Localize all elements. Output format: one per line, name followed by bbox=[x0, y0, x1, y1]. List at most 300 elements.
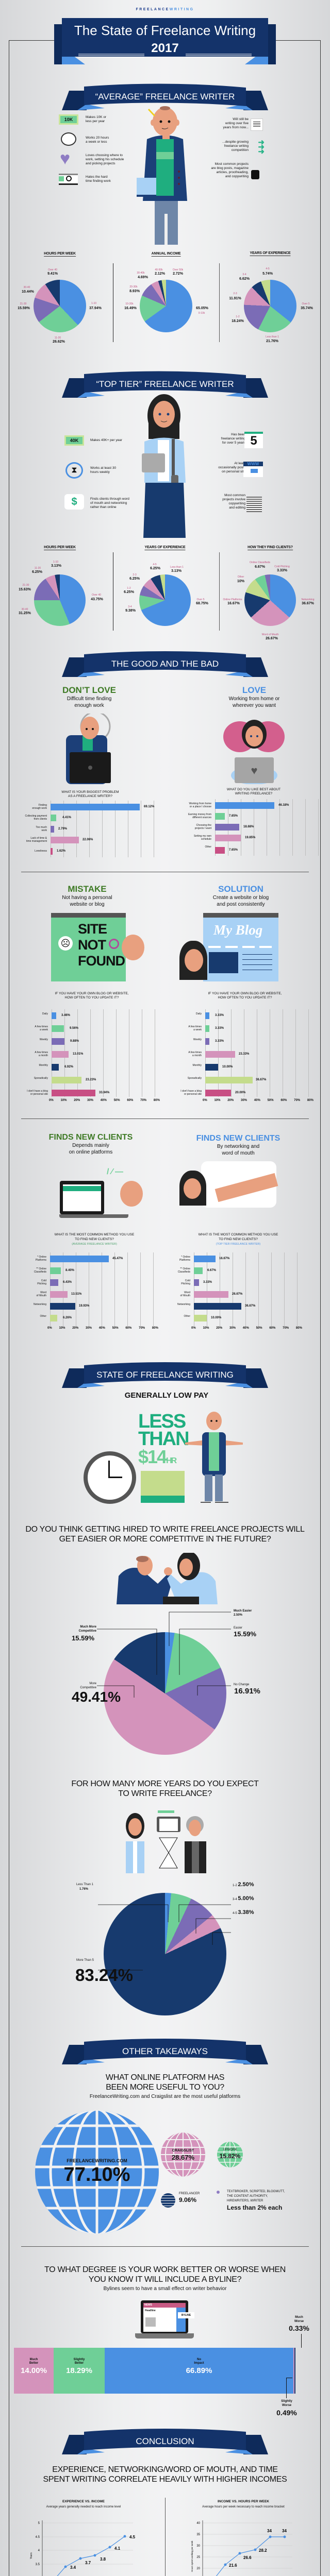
chart: annual income: 0-10k bbox=[199, 312, 205, 315]
chart: top tier experience: 6.25% bbox=[129, 577, 140, 581]
chart: experience vs income: 4.5 bbox=[129, 2535, 136, 2539]
average traits right: freelance writing bbox=[224, 144, 249, 148]
chart: find clients top tier: 20% bbox=[216, 1327, 222, 1330]
banner: other takeaways bbox=[62, 2037, 268, 2065]
chart: find clients average: of Mouth bbox=[37, 1294, 46, 1297]
icon: dollar speech: $ bbox=[71, 496, 77, 507]
chart: find clients top tier: 10.00% bbox=[211, 1316, 221, 1319]
illustration: arm wrestling bbox=[117, 1553, 218, 1604]
average traits left: time finding work bbox=[86, 179, 111, 183]
heading: solution: and post consistently bbox=[217, 902, 265, 907]
chart: years of experience: Over 5 bbox=[302, 302, 310, 306]
icon: calendar 5: 5 bbox=[250, 434, 257, 448]
chart: years of experience: 21.76% bbox=[266, 340, 278, 343]
average traits right: Most common projects bbox=[215, 162, 249, 166]
chart: top tier experience: 9.38% bbox=[125, 609, 136, 613]
pie: years to write bbox=[72, 1875, 268, 2020]
chart: find clients average: 0% bbox=[47, 1327, 52, 1330]
callout: much worse bbox=[286, 2315, 312, 2348]
average traits left: Hates the hard bbox=[86, 175, 108, 179]
icon: pen and ink bbox=[251, 170, 259, 179]
callout: slightly worse: Worse bbox=[282, 2404, 291, 2407]
chart: hours per week average: 10.44% bbox=[22, 290, 34, 294]
chart: years of experience: 1-2 bbox=[236, 315, 240, 318]
chart: find clients top tier: 0% bbox=[191, 1327, 196, 1330]
heading: solution: SOLUTION bbox=[218, 884, 263, 894]
chart: update frequency (top tier): 10.00% bbox=[222, 1065, 233, 1069]
callout: much worse: Worse bbox=[294, 2320, 304, 2323]
average traits right: writing over five bbox=[225, 122, 249, 125]
chart: biggest problem: Collecting payment bbox=[25, 815, 47, 818]
chart: update frequency (average): 23.23% bbox=[86, 1078, 96, 1081]
icon: 40K bbox=[64, 435, 84, 446]
icon: writing paper bbox=[251, 118, 263, 131]
average traits right: articles, proofreading, bbox=[216, 171, 249, 174]
chart: find clients average: 70% bbox=[139, 1327, 145, 1330]
chart: find clients average: Networking bbox=[34, 1303, 46, 1306]
heading: getting hired question: DO YOU THINK GETTING HIRED TO WRITE FREELANCE PROJECTS WILL bbox=[25, 1525, 305, 1534]
chart: update frequency (top tier): a week bbox=[193, 1028, 202, 1031]
chart: like best: 18.68% bbox=[243, 825, 254, 828]
illustration: people and hourglass bbox=[126, 1809, 208, 1873]
chart: update frequency (average): A few times bbox=[35, 1025, 48, 1028]
chart: update frequency (top tier): 23.33% bbox=[239, 1053, 249, 1056]
average traits right: are blog posts, magazine bbox=[211, 166, 249, 170]
chart: find clients average: Pitching bbox=[37, 1282, 46, 1285]
top tier traits left: hours weekly bbox=[90, 470, 110, 474]
chart: hours per week average: 37.94% bbox=[89, 307, 102, 310]
chart: find clients average: Platforms bbox=[36, 1259, 46, 1262]
text: other platforms: Less than 2% each bbox=[227, 2204, 282, 2211]
pie: years to write: Less Than 1 bbox=[76, 1883, 93, 1886]
chart: update frequency (average): 80% bbox=[154, 1099, 160, 1102]
chart: top tier experience: 6.25% bbox=[150, 567, 160, 570]
banner: good and bad: THE GOOD AND THE BAD bbox=[111, 659, 219, 669]
icon: arrows: ➜ bbox=[258, 147, 265, 156]
pie: easier or more competitive: Much Easier bbox=[234, 1609, 252, 1613]
chart: how they find clients: 36.67% bbox=[302, 602, 314, 605]
heading: finds new clients top bbox=[196, 1134, 280, 1156]
heading: getting hired question: GET EASIER OR MORE COMPETITIVE IN THE FUTURE? bbox=[59, 1535, 271, 1544]
chart: income vs hours: 30 bbox=[196, 2545, 201, 2548]
chart: income vs hours: 40 bbox=[196, 2522, 201, 2525]
chart: years of experience: 5.74% bbox=[262, 272, 273, 276]
icon: clock bbox=[61, 132, 76, 146]
average traits right: years from now... bbox=[223, 126, 249, 129]
chart: like best: schedule bbox=[201, 838, 211, 841]
illustration: clock bbox=[84, 1451, 136, 1504]
chart: annual income: 30-40k bbox=[137, 272, 145, 275]
chart: top tier hours: 15.63% bbox=[19, 588, 31, 591]
chart: find clients average: 60% bbox=[125, 1327, 131, 1330]
chart: like best: Choosing the bbox=[196, 824, 211, 827]
banner: top tier bbox=[62, 371, 268, 398]
illustration: handshake bbox=[179, 1161, 278, 1208]
chart: years of experience: 2-3 bbox=[233, 292, 237, 295]
chart: biggest problem: Lack of time & bbox=[30, 837, 47, 840]
banner: conclusion bbox=[62, 2427, 268, 2455]
illustration: laptop search: / ⁄ — bbox=[107, 1167, 123, 1176]
chart: find clients average: Word bbox=[40, 1291, 46, 1294]
pie: easier or more competitive: Easier bbox=[234, 1626, 242, 1630]
heading: finds new clients average: FINDS NEW CLIENTS bbox=[49, 1133, 133, 1142]
illustration: man with laptop bbox=[66, 714, 111, 784]
pie: years to write: 4-5 3.38% bbox=[233, 1909, 254, 1916]
top tier traits right: copywriting bbox=[228, 502, 245, 505]
icon: www: WWW bbox=[248, 462, 259, 466]
average traits right: and copywriting bbox=[225, 175, 249, 178]
byline stacked bar: Better bbox=[29, 2362, 38, 2365]
chart: annual income: 2.12% bbox=[155, 272, 165, 276]
chart: update frequency (average): Weekly bbox=[40, 1038, 48, 1041]
chart: income vs hours bbox=[186, 2500, 299, 2576]
chart: find clients average: * Online bbox=[37, 1256, 46, 1259]
illustration: site not found: ☹ bbox=[61, 938, 70, 948]
chart: like best: or a place I choose bbox=[190, 805, 211, 808]
chart: update frequency (top tier): A few times bbox=[188, 1025, 202, 1028]
chart: hours per week average: Over 40 bbox=[48, 268, 57, 272]
chart: income vs hours: 20 bbox=[196, 2567, 201, 2570]
chart: like best: 46.18% bbox=[278, 804, 289, 807]
byline stacked bar: 18.29% bbox=[66, 2366, 92, 2375]
chart: income vs hours: 21.6 bbox=[229, 2563, 237, 2568]
chart: update frequency (average): a month bbox=[39, 1054, 48, 1057]
chart: like best: WRITING FREELANCE? bbox=[235, 792, 272, 795]
heading: love bbox=[229, 685, 279, 708]
chart: find clients average: 8.40% bbox=[65, 1269, 74, 1272]
chart: biggest problem: 4.41% bbox=[62, 816, 71, 819]
heading: online platform question: WHAT ONLINE PLATFORM HAS bbox=[106, 2073, 224, 2082]
chart: update frequency (average): 6.92% bbox=[64, 1065, 73, 1069]
chart: top tier experience bbox=[124, 546, 208, 626]
banner: conclusion: CONCLUSION bbox=[136, 2436, 194, 2446]
chart: update frequency (top tier): HOW OFTEN TO YOU UPDATE IT? bbox=[218, 996, 272, 999]
chart: update frequency (top tier): 3.33% bbox=[215, 1027, 224, 1030]
chart: find clients top tier: Word bbox=[184, 1291, 190, 1294]
illustration: woman with laptop bbox=[223, 720, 285, 784]
heading: finds new clients average: on online platforms bbox=[69, 1149, 112, 1155]
text: other platforms: HIREWRITERS, iWRITER bbox=[227, 2199, 263, 2202]
pie: easier or more competitive: Much More bbox=[80, 1625, 96, 1629]
chart: annual income: 20-30k bbox=[129, 285, 138, 289]
chart: how they find clients: Word of Mouth bbox=[262, 633, 278, 636]
chart: update frequency (average): Monthly bbox=[39, 1064, 48, 1067]
chart: find clients top tier: TO FIND NEW CLIENTS? bbox=[219, 1238, 258, 1241]
chart: years of experience: Less than 1 bbox=[266, 335, 279, 338]
illustration: my blog: My Blog bbox=[213, 922, 262, 938]
chart: how they find clients: 3.33% bbox=[277, 569, 287, 572]
pie: easier or more competitive: No Change bbox=[234, 1683, 249, 1686]
chart: find clients top tier: 70% bbox=[283, 1327, 289, 1330]
globe: upwork: UPWORK bbox=[223, 2148, 237, 2151]
chart: update frequency (top tier): IF YOU HAVE YOUR OWN BLOG OR WEBSITE, bbox=[208, 992, 282, 995]
heading: don't love: Difficult time finding bbox=[67, 696, 111, 702]
chart: biggest problem: from clients bbox=[34, 818, 47, 821]
average traits left: Works 20 hours bbox=[86, 136, 109, 140]
divider bbox=[21, 1118, 309, 1119]
chart: find clients top tier bbox=[177, 1233, 302, 1330]
chart: top tier hours: 31.25% bbox=[19, 612, 31, 615]
top tier traits left: of mouth and networking bbox=[90, 501, 127, 505]
heading: mistake: Not having a personal bbox=[62, 895, 112, 901]
average traits left: work, setting his schedule bbox=[86, 158, 124, 161]
illustration: laptop search bbox=[59, 1167, 143, 1218]
chart: annual income: ANNUAL INCOME bbox=[152, 252, 180, 256]
chart: top tier experience: 2-3 bbox=[133, 573, 137, 577]
byline stacked bar: Better bbox=[75, 2362, 84, 2365]
chart: years of experience: 6.62% bbox=[239, 277, 250, 281]
top tier traits left bbox=[64, 435, 129, 510]
chart: update frequency (average): A few times bbox=[35, 1051, 48, 1054]
heading: finds new clients top: word of mouth bbox=[222, 1150, 255, 1156]
chart: find clients top tier: Pitching bbox=[181, 1282, 190, 1285]
chart: find clients top tier: Other bbox=[184, 1315, 190, 1318]
chart: find clients average: 6.43% bbox=[63, 1281, 72, 1284]
illustration: my blog bbox=[179, 913, 278, 981]
callout: slightly worse: 0.49% bbox=[276, 2409, 297, 2417]
chart: find clients top tier: ** Online bbox=[180, 1267, 190, 1270]
chart: top tier experience: 1-2 bbox=[127, 587, 131, 590]
heading: generally low pay: GENERALLY LOW PAY bbox=[125, 1391, 208, 1400]
chart: annual income bbox=[124, 252, 208, 332]
chart: experience vs income: 3.4 bbox=[70, 2565, 76, 2570]
illustration: average man bbox=[137, 106, 187, 245]
average traits right: ...despite growing bbox=[222, 140, 249, 144]
chart: find clients average: 10% bbox=[59, 1327, 65, 1330]
chart: find clients average: 45.47% bbox=[112, 1257, 123, 1260]
chart: find clients top tier: 16.67% bbox=[219, 1257, 229, 1260]
title banner: 2017 bbox=[151, 41, 179, 55]
chart: biggest problem: WHAT IS YOUR BIGGEST PROBLEM bbox=[61, 790, 119, 794]
callout: much worse: 0.33% bbox=[289, 2324, 309, 2332]
heading: love: Working from home or bbox=[229, 696, 279, 702]
chart: like best: different sources bbox=[192, 816, 211, 819]
average traits right: Will still be bbox=[233, 117, 249, 121]
heading: finds new clients top: FINDS NEW CLIENTS bbox=[196, 1134, 280, 1143]
chart: top tier experience: 4-5 bbox=[153, 563, 157, 566]
byline stacked bar bbox=[14, 2348, 295, 2394]
chart: experience vs income: Average years generally needed to reach income level bbox=[46, 2505, 121, 2509]
chart: biggest problem: Finding bbox=[39, 804, 47, 807]
chart: find clients top tier: 3.33% bbox=[203, 1281, 212, 1284]
chart: experience vs income: 3.8 bbox=[100, 2557, 106, 2562]
chart: biggest problem: 69.12% bbox=[144, 805, 154, 808]
globe: craigslist bbox=[161, 2132, 205, 2177]
pie: easier or more competitive: Competitive bbox=[79, 1630, 96, 1633]
chart: update frequency (average): 60% bbox=[127, 1099, 133, 1102]
pie: years to write: 3-4 5.00% bbox=[233, 1895, 254, 1902]
pie: easier or more competitive: More bbox=[89, 1682, 96, 1685]
chart: like best: 7.65% bbox=[229, 849, 238, 852]
chart: update frequency (top tier): 20.00% bbox=[235, 1091, 245, 1094]
chart: update frequency (average): 30% bbox=[87, 1099, 93, 1102]
banner: average bbox=[62, 83, 268, 110]
chart: update frequency (average): 3.46% bbox=[61, 1014, 70, 1017]
illustration: laptop news byline: NEWS bbox=[144, 2303, 152, 2307]
icon: arrows: ➜ bbox=[258, 143, 265, 151]
chart: years of experience: 3-4 bbox=[242, 273, 246, 276]
chart: experience vs income: 3.5 bbox=[36, 2563, 40, 2566]
chart: top tier experience: YEARS OF EXPERIENCE bbox=[144, 546, 186, 549]
globe: freelancer: 9.06% bbox=[179, 2196, 196, 2204]
chart: update frequency (top tier): 0% bbox=[203, 1099, 207, 1102]
chart: years of experience bbox=[229, 251, 313, 343]
text: less than $14 hr: $14HR bbox=[138, 1446, 176, 1467]
heading: finds new clients top: By networking and bbox=[217, 1144, 259, 1149]
globe: upwork bbox=[217, 2142, 243, 2167]
chart: like best: WHAT DO YOU LIKE BEST ABOUT bbox=[227, 788, 280, 791]
heading: online platform question: BEEN MORE USEFUL TO YOU? bbox=[106, 2083, 224, 2092]
chart: update frequency (average): HOW OFTEN TO YOU UPDATE IT? bbox=[65, 996, 119, 999]
illustration: shrugging man bbox=[185, 1412, 243, 1503]
heading: mistake: website or blog bbox=[70, 902, 105, 907]
chart: income vs hours: 34 bbox=[282, 2529, 287, 2533]
chart: update frequency (top tier): Daily bbox=[196, 1012, 202, 1015]
chart: update frequency (top tier): 36.67% bbox=[256, 1078, 266, 1081]
chart: top tier experience: 68.75% bbox=[196, 602, 208, 605]
illustration: woman with laptop: ♥ bbox=[251, 764, 258, 777]
icon: search bbox=[59, 174, 78, 185]
globe: craigslist: CRAIGSLIST bbox=[172, 2149, 194, 2153]
pie: years to write: 1-2 2.50% bbox=[233, 1882, 254, 1888]
illustration: site not found: FOUND bbox=[78, 953, 125, 969]
chart: update frequency (top tier): 10% bbox=[214, 1099, 220, 1102]
icon: hourglass cycle bbox=[65, 462, 83, 479]
chart: experience vs income: 4.1 bbox=[114, 2546, 121, 2551]
byline stacked bar: Much bbox=[30, 2358, 38, 2361]
chart: update frequency (average): or personal site bbox=[30, 1093, 48, 1096]
top tier traits right: Has been bbox=[231, 433, 245, 436]
chart: income vs hours: 34 bbox=[267, 2529, 272, 2533]
chart: top tier experience: Over 5 bbox=[196, 598, 205, 601]
chart: annual income: 10-20k bbox=[125, 302, 134, 306]
chart: update frequency (top tier): 40% bbox=[254, 1099, 260, 1102]
chart: experience vs income: 5 bbox=[38, 2522, 40, 2525]
chart: update frequency (average): 70% bbox=[140, 1099, 146, 1102]
heading: conclusion bbox=[43, 2465, 287, 2484]
heading: love: wherever you want bbox=[233, 703, 276, 708]
chart: how they find clients: Networking bbox=[301, 598, 315, 601]
chart: top tier hours: 43.75% bbox=[91, 598, 103, 601]
chart: top tier hours bbox=[19, 546, 103, 626]
top tier traits left: Works at least 30 bbox=[90, 466, 116, 470]
top tier traits right: occasionally posts bbox=[218, 466, 245, 469]
banner: other takeaways: OTHER TAKEAWAYS bbox=[122, 2046, 208, 2056]
divider bbox=[21, 2246, 309, 2247]
chart: update frequency (top tier): 30% bbox=[241, 1099, 247, 1102]
icon: calendar 5 bbox=[244, 432, 263, 448]
chart: find clients top tier: 80% bbox=[296, 1327, 302, 1330]
top tier traits right: and editing bbox=[229, 506, 245, 510]
heading: online platform question: FreelanceWriting.com and Craigslist are the most useful platforms bbox=[90, 2094, 240, 2099]
chart: like best: 7.65% bbox=[229, 815, 238, 818]
chart: update frequency (top tier): Monthly bbox=[192, 1064, 202, 1067]
chart: top tier hours: 6.25% bbox=[32, 570, 42, 574]
chart: update frequency (average): Daily bbox=[42, 1012, 48, 1015]
average traits left: Loves choosing where to bbox=[86, 154, 123, 157]
chart: update frequency (average): 13.01% bbox=[73, 1053, 83, 1056]
pie: years to write: 83.24% bbox=[75, 1965, 133, 1985]
icon: arrows bbox=[258, 138, 265, 156]
chart: income vs hours: 28.2 bbox=[259, 2548, 267, 2553]
chart: top tier hours: 11-20 bbox=[35, 567, 41, 570]
chart: experience vs income: 3.7 bbox=[85, 2561, 91, 2565]
chart: find clients average: 13.51% bbox=[71, 1293, 81, 1296]
chart: find clients top tier: 10% bbox=[203, 1327, 209, 1330]
icon: documents bbox=[246, 497, 262, 512]
title banner: The State of Freelance Writing bbox=[74, 23, 256, 38]
heading: don't love: enough work bbox=[74, 703, 104, 708]
chart: find clients top tier: 6.67% bbox=[207, 1269, 216, 1272]
chart: find clients top tier: Cold bbox=[185, 1279, 190, 1282]
globe: freelancer: FREELANCER bbox=[179, 2192, 200, 2195]
chart: years of experience: 11.91% bbox=[229, 297, 241, 300]
top tier traits left: Makes 40K+ per year bbox=[90, 438, 122, 442]
chart: biggest problem: work bbox=[41, 829, 47, 832]
chart: like best bbox=[188, 788, 319, 856]
chart: find clients average: 19.93% bbox=[79, 1304, 89, 1308]
chart: update frequency (top tier): 3.33% bbox=[215, 1014, 224, 1017]
top tier traits right: on personal site bbox=[222, 470, 245, 473]
icon: 10K money bbox=[59, 114, 78, 125]
chart: find clients top tier: 50% bbox=[256, 1327, 262, 1330]
chart: income vs hours: Hours spent working per week bbox=[191, 2540, 193, 2572]
chart: top tier hours: 3.13% bbox=[51, 564, 61, 568]
chart: annual income: Over 50k bbox=[173, 268, 183, 272]
heading: years to write question: TO WRITE FREELANCE? bbox=[118, 1789, 212, 1798]
pie: easier or more competitive: 16.91% bbox=[234, 1687, 260, 1696]
icon: 40K: 40K bbox=[70, 438, 78, 443]
chart: top tier experience: 6.25% bbox=[124, 590, 134, 594]
chart: find clients average: 80% bbox=[152, 1327, 158, 1330]
chart: find clients top tier: WHAT IS THE MOST COMMON METHOD YOU USE bbox=[199, 1233, 278, 1236]
chart: find clients top tier: Networking bbox=[177, 1303, 190, 1306]
chart: how they find clients: Online Platforms bbox=[223, 598, 242, 601]
chart: income vs hours: INCOME VS. HOURS PER WEEK bbox=[218, 2500, 269, 2503]
chart: find clients top tier: * Online bbox=[181, 1256, 190, 1259]
chart: find clients top tier: 36.67% bbox=[245, 1304, 255, 1308]
chart: find clients average: 6.26% bbox=[63, 1316, 72, 1319]
pie charts row 2 dividers bbox=[113, 552, 220, 631]
banner: good and bad bbox=[62, 651, 268, 677]
chart: experience vs income: EXPERIENCE VS. INCOME bbox=[62, 2500, 105, 2503]
chart: update frequency (top tier): a month bbox=[192, 1054, 202, 1057]
chart: update frequency (top tier): 50% bbox=[268, 1099, 274, 1102]
chart: income vs hours: 26.6 bbox=[243, 2555, 252, 2560]
chart: top tier hours: HOURS PER WEEK bbox=[44, 546, 76, 549]
heading: finds new clients average bbox=[49, 1133, 133, 1155]
chart: like best: Setting my own bbox=[194, 835, 211, 838]
heading: online platform question bbox=[90, 2073, 240, 2099]
chart: years of experience: YEARS OF EXPERIENCE bbox=[250, 251, 291, 255]
chart: income vs hours: 35 bbox=[196, 2533, 201, 2536]
heading: mistake: MISTAKE bbox=[68, 884, 107, 894]
average traits left bbox=[59, 114, 124, 185]
chart: biggest problem: AS A FREELANCE WRITER? bbox=[68, 794, 112, 798]
icon: dollar speech bbox=[64, 494, 84, 510]
icon: 10K money: 10K bbox=[64, 117, 73, 122]
pie charts row 1 dividers bbox=[113, 263, 220, 342]
heading: mistake bbox=[62, 884, 112, 907]
heading: solution: Create a website or blog bbox=[213, 895, 269, 901]
pie: easier or more competitive: 2.50% bbox=[234, 1614, 242, 1617]
top tier traits right: projects involve bbox=[222, 498, 245, 501]
globe: freelancewriting.com: 77.10% bbox=[64, 2164, 130, 2185]
globe: freelancewriting.com bbox=[35, 2110, 159, 2234]
chart: find clients average: Classifieds bbox=[34, 1270, 46, 1274]
top tier traits left: rather than online bbox=[90, 505, 117, 509]
chart: hours per week average: 26.62% bbox=[53, 340, 65, 344]
